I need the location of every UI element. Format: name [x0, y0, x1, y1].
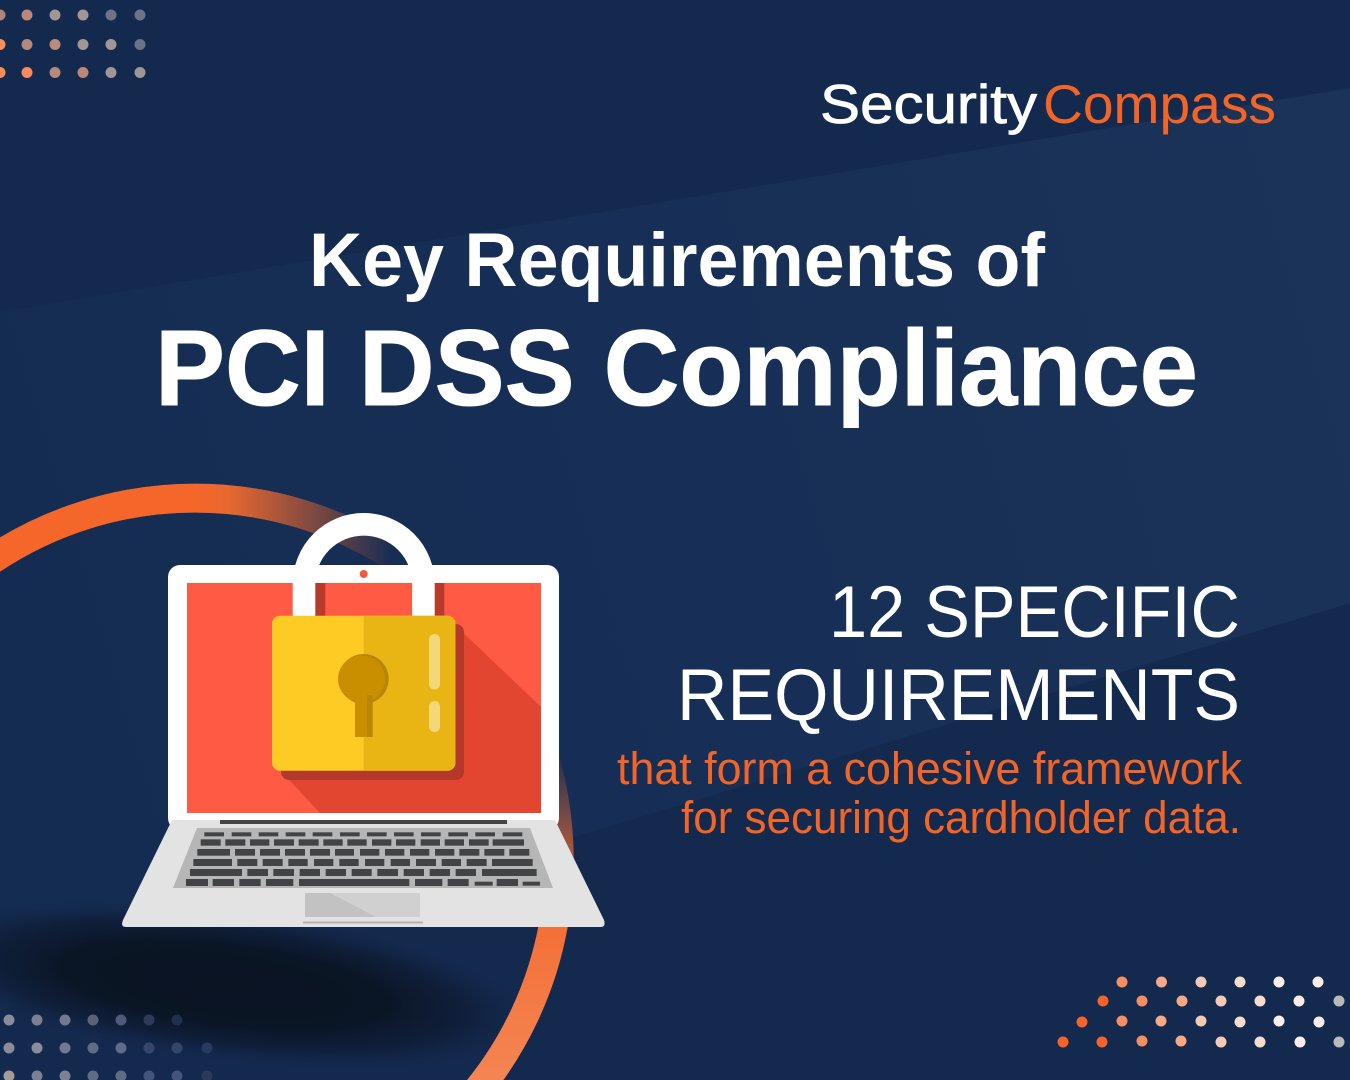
logo: Security Compass: Compass — [1043, 73, 1276, 135]
logo: Security Compass: Security — [820, 73, 1038, 135]
laptop screen — [187, 583, 541, 813]
dot pattern: bottom right — [1058, 976, 1344, 1048]
padlock keyhole — [338, 654, 389, 737]
title — [155, 218, 1198, 428]
logo: Security Compass — [820, 73, 1276, 135]
dot pattern: bottom left — [4, 1014, 212, 1080]
padlock shackle — [304, 524, 423, 616]
hinge — [220, 820, 507, 824]
trackpad — [303, 893, 423, 924]
icon: laptop with padlock — [122, 524, 605, 927]
padlock highlights — [429, 634, 440, 732]
subheading: for securing cardholder data. — [681, 792, 1241, 843]
padlock long shadow — [280, 625, 541, 813]
heading: 12 specific requirements: 12 SPECIFIC — [829, 572, 1240, 653]
orange ring — [0, 498, 559, 1080]
title: PCI DSS Compliance — [155, 307, 1198, 428]
dot pattern: top left — [0, 10, 146, 78]
title: Key Requirements of — [309, 218, 1046, 303]
laptop lid — [168, 565, 559, 830]
subheading: that form a cohesive framework — [617, 743, 1242, 794]
padlock body — [272, 616, 464, 780]
heading: 12 specific requirements: REQUIREMENTS — [677, 655, 1240, 736]
laptop base — [122, 820, 605, 927]
keys — [186, 832, 540, 886]
heading: 12 specific requirements — [677, 572, 1240, 736]
subheading — [617, 743, 1242, 843]
shackle shadow on screen — [315, 583, 444, 616]
webcam — [360, 570, 368, 578]
keyboard deck — [173, 828, 553, 888]
shackle shadow on bezel — [314, 524, 433, 616]
floor shadow — [0, 869, 552, 1080]
